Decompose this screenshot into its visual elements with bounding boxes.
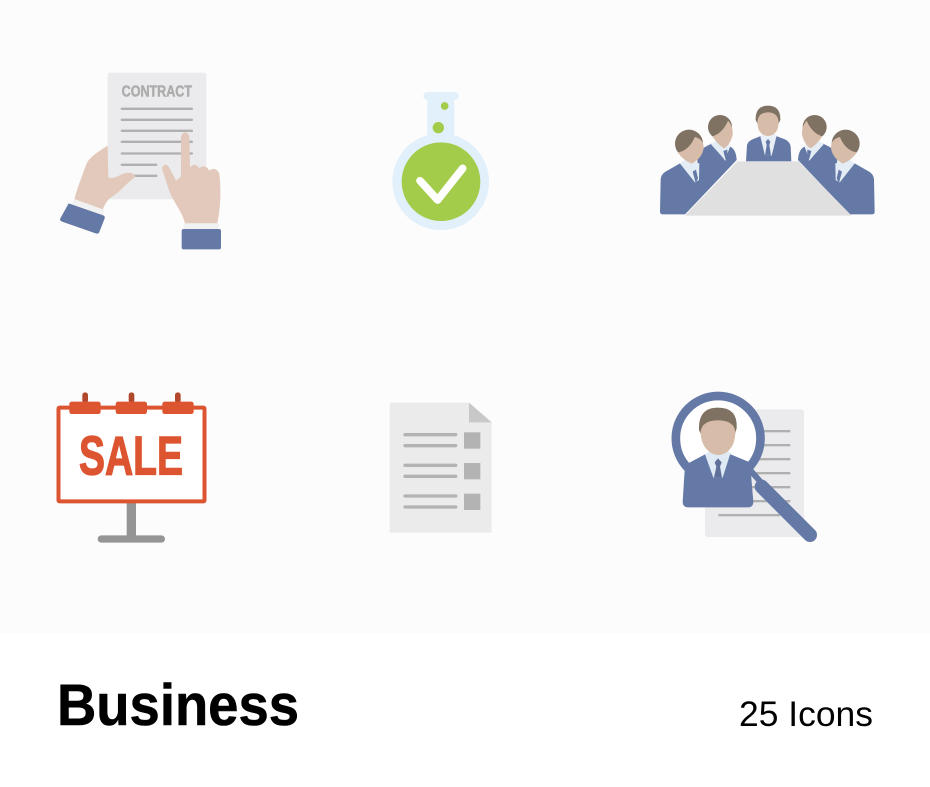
icon: meeting at table [660, 106, 875, 216]
flask glass [392, 92, 489, 230]
icon: document checklist [390, 403, 492, 533]
list squares [464, 432, 480, 510]
contract sheet [108, 73, 206, 199]
sale text: SALE [79, 425, 183, 487]
billboard panel [58, 408, 204, 501]
magnifier ring [676, 396, 760, 481]
left hand [60, 146, 136, 234]
right back person [798, 115, 838, 192]
magnifier handle [750, 470, 810, 535]
billboard stand [98, 503, 165, 543]
left front person [660, 130, 708, 214]
icon: sale billboard [58, 392, 204, 543]
icon: contract and hands [60, 73, 221, 249]
conference table [685, 161, 852, 216]
right hand [162, 132, 221, 249]
contract text lines [121, 108, 193, 177]
folded corner [469, 403, 492, 422]
contract heading: CONTRACT [122, 84, 193, 101]
right front person [826, 130, 875, 214]
hanging pegs [82, 392, 181, 403]
flask liquid [402, 142, 480, 221]
title: Business [57, 673, 299, 738]
bubbles [433, 102, 448, 133]
icon: flask with check [392, 92, 489, 230]
candidate portrait [683, 408, 753, 507]
clips [69, 402, 194, 414]
icon: candidate search [676, 396, 810, 537]
centre person [746, 106, 791, 161]
check mark [420, 168, 463, 200]
resume lines [718, 430, 790, 516]
list lines [403, 433, 457, 509]
left back person [697, 115, 737, 192]
icon count: 25 Icons [739, 695, 873, 734]
resume sheet [705, 409, 804, 537]
document sheet [390, 403, 492, 533]
